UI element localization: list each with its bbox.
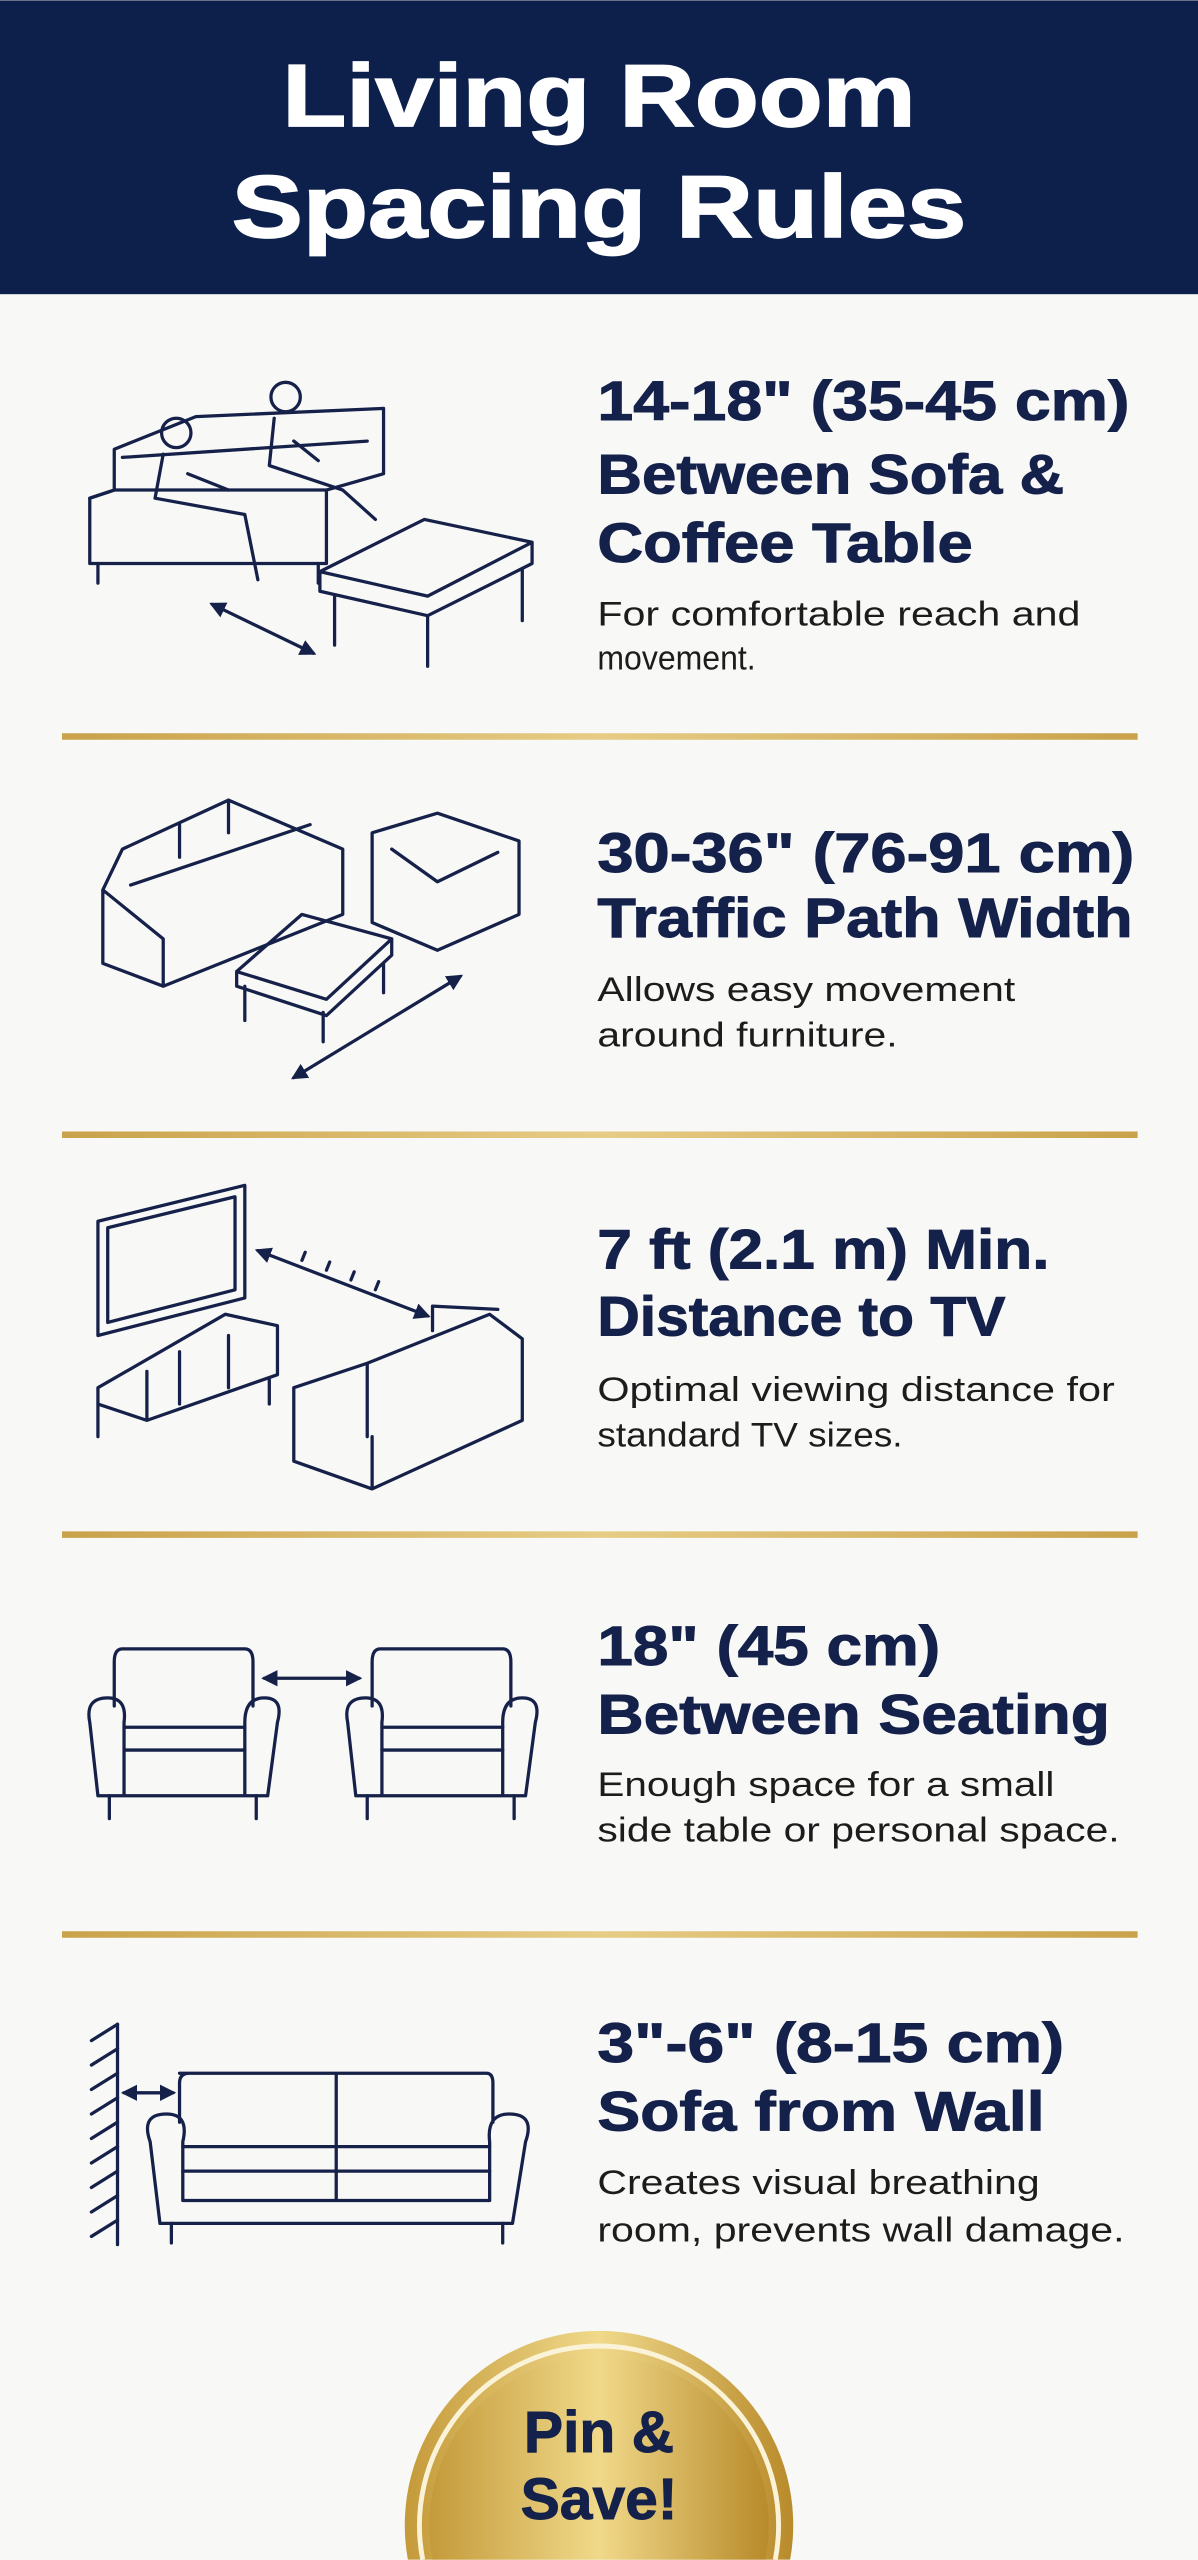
dividers <box>62 733 1138 1938</box>
title: Spacing Rules <box>232 157 966 256</box>
text: section 2: 30-36" (76-91 cm) <box>597 822 1134 884</box>
text: section 3: Distance to TV <box>597 1285 1005 1347</box>
badge: Pin & Save: Pin & <box>524 2400 674 2465</box>
text: section 1: For comfortable reach and <box>597 596 1080 634</box>
text: section 3: Optimal viewing distance for <box>597 1371 1115 1409</box>
text: section 5 <box>597 2012 1125 2249</box>
text: section 4: side table or personal space. <box>597 1811 1120 1849</box>
text: section 5: room, prevents wall damage. <box>597 2211 1125 2249</box>
text: section 5: Creates visual breathing <box>597 2164 1040 2202</box>
text: section 4: Enough space for a small <box>597 1766 1054 1804</box>
text: section 4: Between Seating <box>597 1684 1110 1746</box>
icon: sofa, armchair, table, traffic path arrow <box>103 800 519 1078</box>
icon: sofa with people and coffee table <box>90 382 532 666</box>
text: section 5: Sofa from Wall <box>597 2080 1045 2142</box>
badge: Pin & Save <box>405 2331 793 2560</box>
badge: Pin & Save: Save! <box>521 2467 677 2532</box>
text: section 2: Traffic Path Width <box>597 887 1133 949</box>
icon: TV, stand and sofa <box>98 1185 522 1489</box>
text: section 2: Allows easy movement <box>597 971 1016 1009</box>
text: section 1 <box>597 370 1129 678</box>
text: section 1: movement. <box>597 640 756 678</box>
icon: two armchairs with arrow <box>89 1649 537 1819</box>
icon: wall, sofa and arrow <box>91 2024 528 2245</box>
text: section 3: 7 ft (2.1 m) Min. <box>597 1219 1049 1281</box>
text: section 1: Between Sofa & <box>597 443 1064 505</box>
text: section 2 <box>597 822 1134 1055</box>
text: section 1: 14-18" (35-45 cm) <box>597 370 1129 432</box>
text: section 1: Coffee Table <box>597 512 973 574</box>
title <box>232 46 966 256</box>
text: section 3: standard TV sizes. <box>597 1416 903 1454</box>
text: section 2: around furniture. <box>597 1017 898 1055</box>
text: section 3 <box>597 1219 1115 1454</box>
header banner <box>0 0 1198 294</box>
text: section 4 <box>597 1615 1120 1849</box>
text: section 5: 3"-6" (8-15 cm) <box>597 2012 1064 2074</box>
text: section 4: 18" (45 cm) <box>597 1615 940 1677</box>
title: Living Room <box>282 46 916 145</box>
